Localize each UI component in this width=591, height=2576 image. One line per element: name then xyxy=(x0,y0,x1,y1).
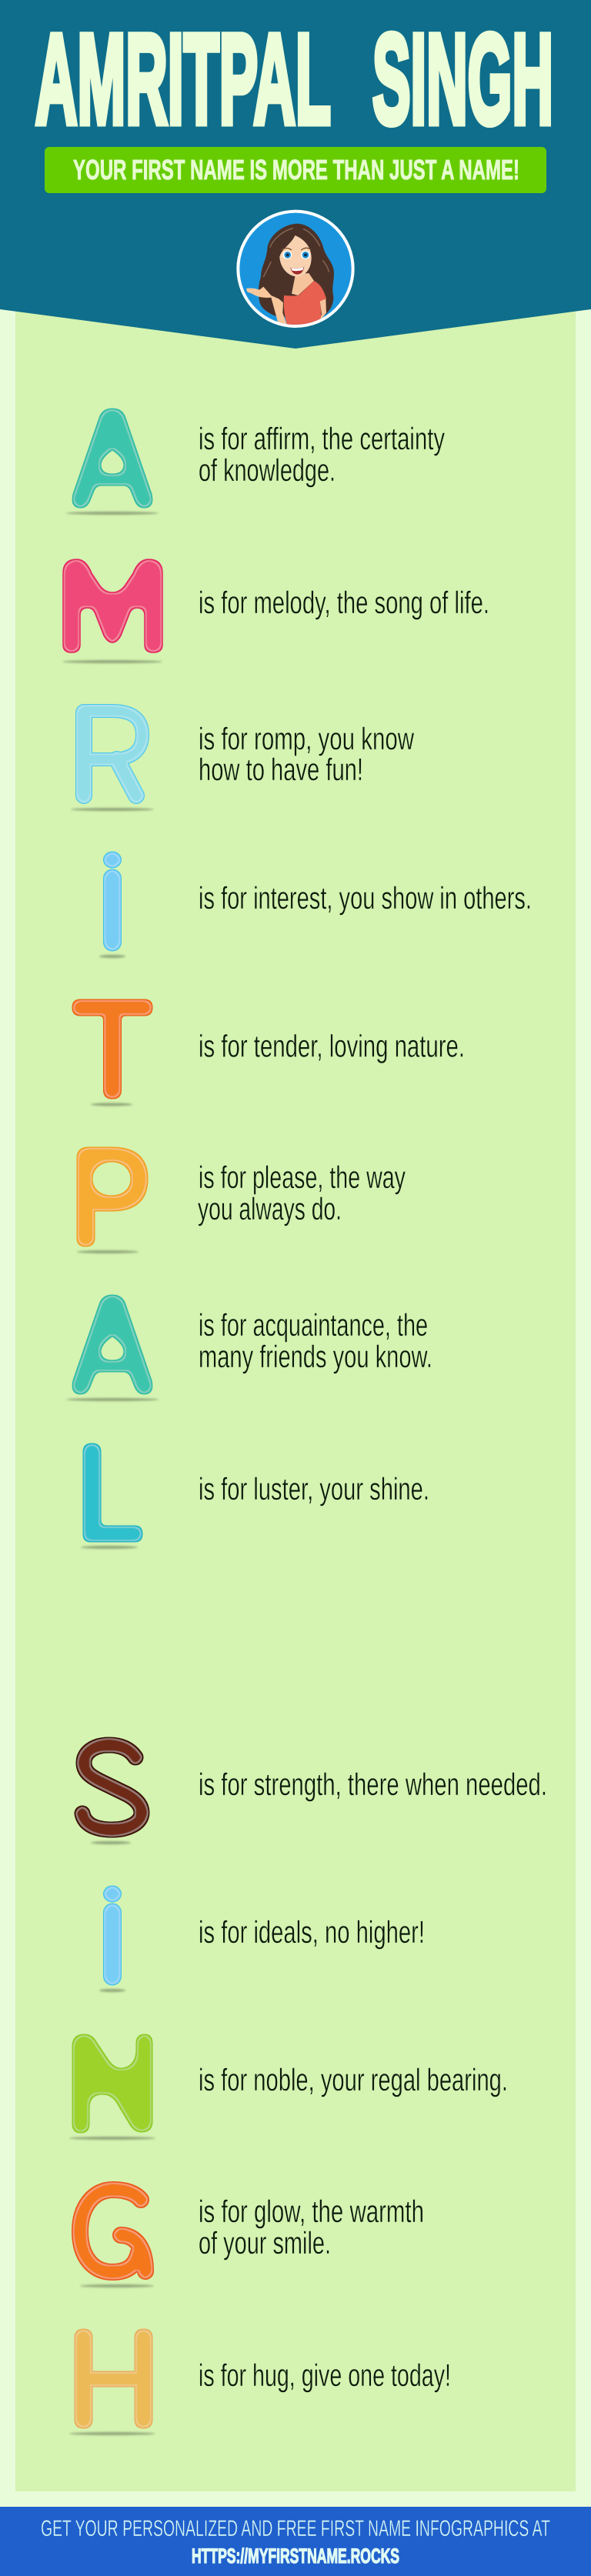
shadow xyxy=(81,1546,138,1549)
text xyxy=(199,2194,424,2261)
text: how to have fun! xyxy=(199,752,363,787)
icon: letter i blue xyxy=(103,852,122,951)
footer xyxy=(0,2507,591,2576)
icon: letter S brown xyxy=(82,1745,142,1830)
icon: letter i blue xyxy=(103,1886,122,1985)
icon: letter N green xyxy=(72,2034,152,2133)
header chevron xyxy=(0,0,591,349)
row: T tender xyxy=(72,999,465,1106)
shadow xyxy=(80,2284,154,2287)
row: I interest xyxy=(99,852,532,958)
icon: letter H yellow xyxy=(75,2329,152,2428)
text: is for please, the way xyxy=(199,1160,406,1195)
text: many friends you know. xyxy=(199,1339,432,1374)
text: is for tender, loving nature. xyxy=(199,1028,465,1063)
icon: letter T orange xyxy=(72,999,152,1099)
icon: letter A teal xyxy=(72,409,152,508)
row: M melody xyxy=(62,559,489,663)
row: A affirm xyxy=(66,409,445,515)
text xyxy=(199,421,445,488)
shadow xyxy=(99,1989,125,1992)
icon: letter A teal xyxy=(72,1295,152,1394)
row: H hug xyxy=(69,2329,451,2435)
shadow xyxy=(99,955,125,958)
shadow xyxy=(91,1841,131,1844)
row: S strength xyxy=(82,1745,547,1844)
shadow xyxy=(62,660,162,663)
text xyxy=(199,721,414,787)
shadow xyxy=(77,1250,139,1253)
row: P please xyxy=(77,1147,406,1253)
row: G glow xyxy=(80,2190,424,2287)
shadow xyxy=(69,2137,155,2140)
row: A acquaintance xyxy=(66,1295,432,1401)
row: R romp xyxy=(71,711,414,811)
text: is for luster, your shine. xyxy=(199,1471,429,1507)
shadow xyxy=(66,1398,159,1401)
text: is for hug, give one today! xyxy=(199,2357,451,2393)
text: is for acquaintance, the xyxy=(199,1307,428,1343)
text: of your smile. xyxy=(199,2225,331,2261)
footer url: HTTPS://MYFIRSTNAME.ROCKS xyxy=(192,2544,399,2568)
text: is for glow, the warmth xyxy=(199,2194,424,2229)
text: is for affirm, the certainty xyxy=(199,421,445,456)
text: is for romp, you know xyxy=(199,721,414,756)
text: you always do. xyxy=(198,1191,342,1226)
shadow xyxy=(66,512,159,515)
row: L luster xyxy=(81,1443,429,1549)
icon: letter P amber xyxy=(77,1147,148,1246)
icon: letter M pink xyxy=(63,559,162,652)
icon: letter L teal blue xyxy=(83,1443,142,1542)
text xyxy=(199,1307,432,1374)
text: of knowledge. xyxy=(199,452,336,488)
text: is for ideals, no higher! xyxy=(199,1914,425,1950)
row: N noble xyxy=(69,2034,508,2140)
icon: letter R light blue xyxy=(84,711,142,796)
shadow xyxy=(69,2432,155,2435)
shadow xyxy=(91,1103,132,1106)
icon: letter G orange xyxy=(80,2190,145,2272)
text xyxy=(198,1160,406,1226)
icon: avatar portrait xyxy=(236,210,355,328)
subtitle banner xyxy=(45,147,546,193)
shadow xyxy=(71,808,154,811)
row: I ideals xyxy=(99,1886,425,1992)
